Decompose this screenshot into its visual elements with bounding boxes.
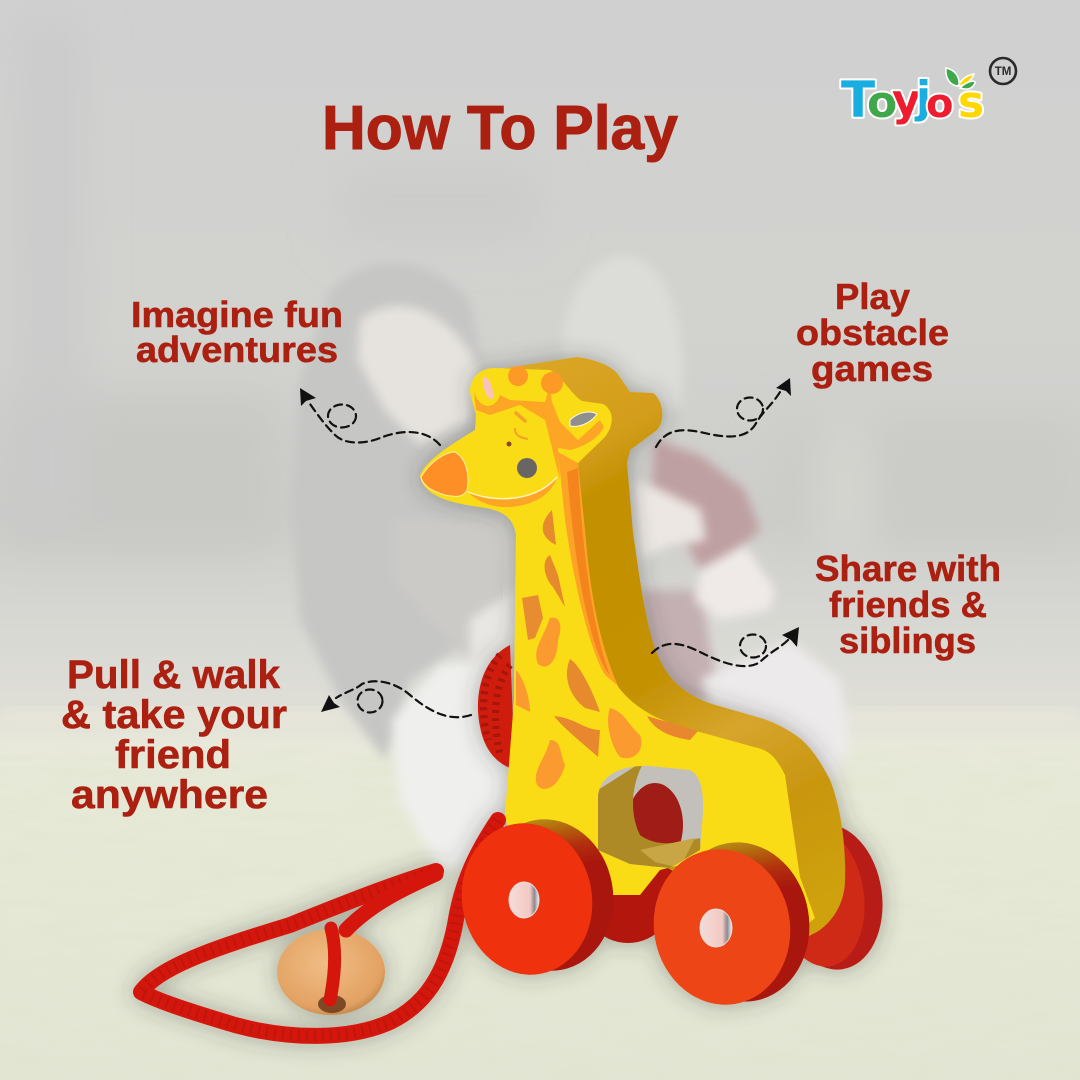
logo: Toyjos	[841, 58, 1016, 129]
label: Pull & walk & take your friend anywhere: anywhere	[71, 773, 268, 817]
label: Share with friends & siblings: friends &	[829, 584, 987, 625]
giraffe side thickness	[480, 357, 845, 945]
rear-left wheel	[578, 833, 678, 943]
logo wordmark	[841, 71, 984, 129]
label: Play obstacle games: obstacle	[796, 312, 949, 353]
cutout in giraffe body	[598, 766, 704, 868]
arrow: to Imagine fun adventures	[300, 388, 440, 445]
label: Imagine fun adventures: Imagine fun	[131, 294, 343, 335]
giraffe spots	[516, 510, 698, 789]
child's shirt	[650, 440, 760, 570]
label: Imagine fun adventures: adventures	[136, 329, 338, 370]
giraffe eye hole and hole marks	[506, 412, 597, 478]
logo wordmark: j	[914, 72, 931, 123]
label: Imagine fun adventures	[131, 294, 343, 370]
label: Pull & walk & take your friend anywhere	[61, 653, 287, 817]
giraffe front face	[420, 368, 815, 930]
woman's hair	[290, 263, 500, 760]
logo leaves	[946, 68, 975, 89]
giraffe nose and mouth	[421, 452, 557, 507]
giraffe neck stripe	[558, 452, 618, 686]
background photo: mother and child	[290, 255, 850, 870]
child's arm	[695, 545, 775, 620]
front-left wheel	[450, 809, 625, 985]
child's hat	[562, 255, 684, 410]
logo wordmark: o	[867, 77, 897, 128]
label: Pull & walk & take your friend anywhere: friend	[115, 733, 231, 777]
label: Share with friends & siblings: siblings	[839, 620, 976, 661]
label: Pull & walk & take your friend anywhere: & take your	[61, 693, 287, 737]
woman's white trousers	[392, 660, 515, 870]
toy: rope and ball, wheels, giraffe	[141, 357, 892, 1036]
logo wordmark: y	[892, 75, 921, 126]
logo wordmark: T	[841, 71, 875, 129]
arrow: to Pull & walk	[321, 681, 471, 717]
title: How To Play	[322, 94, 678, 163]
child's hand	[635, 480, 705, 560]
rear rope bundle	[478, 645, 515, 770]
logo wordmark: s	[958, 77, 984, 128]
trademark badge: TM	[995, 66, 1011, 78]
label: Share with friends & siblings: Share with	[815, 548, 1001, 589]
front-right wheel	[641, 831, 822, 1016]
wooden ball	[277, 929, 385, 1015]
arrow: to Share with friends & siblings	[652, 627, 799, 666]
label: Play obstacle games: Play	[835, 276, 910, 317]
woman's face	[358, 306, 480, 445]
trademark badge	[990, 58, 1016, 84]
arrow: to Play obstacle games	[656, 378, 791, 447]
label: Play obstacle games: games	[811, 348, 933, 389]
label: Play obstacle games	[796, 276, 949, 389]
woman's chest and strap top	[395, 520, 510, 660]
label: Pull & walk & take your friend anywhere: Pull & walk	[67, 653, 281, 697]
rope	[141, 820, 498, 1036]
logo wordmark: o	[926, 81, 953, 127]
giraffe ear and horns	[474, 366, 604, 480]
rope loop over ball	[330, 874, 436, 1000]
child's trousers	[700, 640, 850, 780]
rear-right wheel	[767, 818, 892, 976]
label: Share with friends & siblings	[815, 548, 1001, 661]
